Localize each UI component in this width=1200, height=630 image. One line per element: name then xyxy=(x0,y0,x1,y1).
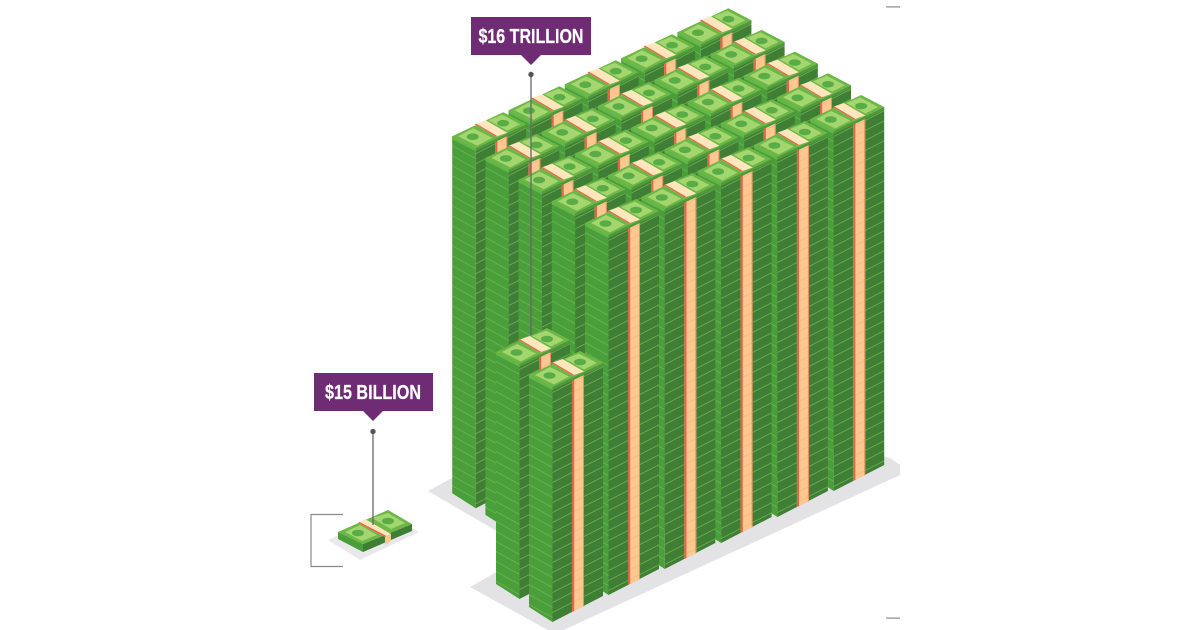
front row stacks xyxy=(585,95,884,595)
middle row stacks xyxy=(519,52,818,552)
crop tick: top right xyxy=(886,6,900,8)
short stack: back xyxy=(496,328,570,599)
$16 trillion grid of 25 money stacks xyxy=(452,8,884,595)
ground shadow: large stacks xyxy=(428,380,900,630)
crop tick: bottom right xyxy=(886,618,900,619)
back row stacks xyxy=(452,8,751,508)
fourth row stacks xyxy=(485,30,785,530)
second row stacks xyxy=(552,73,851,573)
leader line: $16 trillion xyxy=(528,72,534,340)
label: $16 trillion xyxy=(471,17,591,65)
short stack: front xyxy=(529,351,603,622)
leader line: $15 billion xyxy=(370,429,376,525)
label: $15 billion xyxy=(314,373,433,421)
bracket around single stack xyxy=(311,514,343,566)
label: $16 trillion: $16 TRILLION xyxy=(478,25,584,48)
label: $15 billion: $15 BILLION xyxy=(325,381,421,404)
single money stack: $15 billion xyxy=(338,510,412,552)
ground shadow: single stack xyxy=(328,513,419,560)
